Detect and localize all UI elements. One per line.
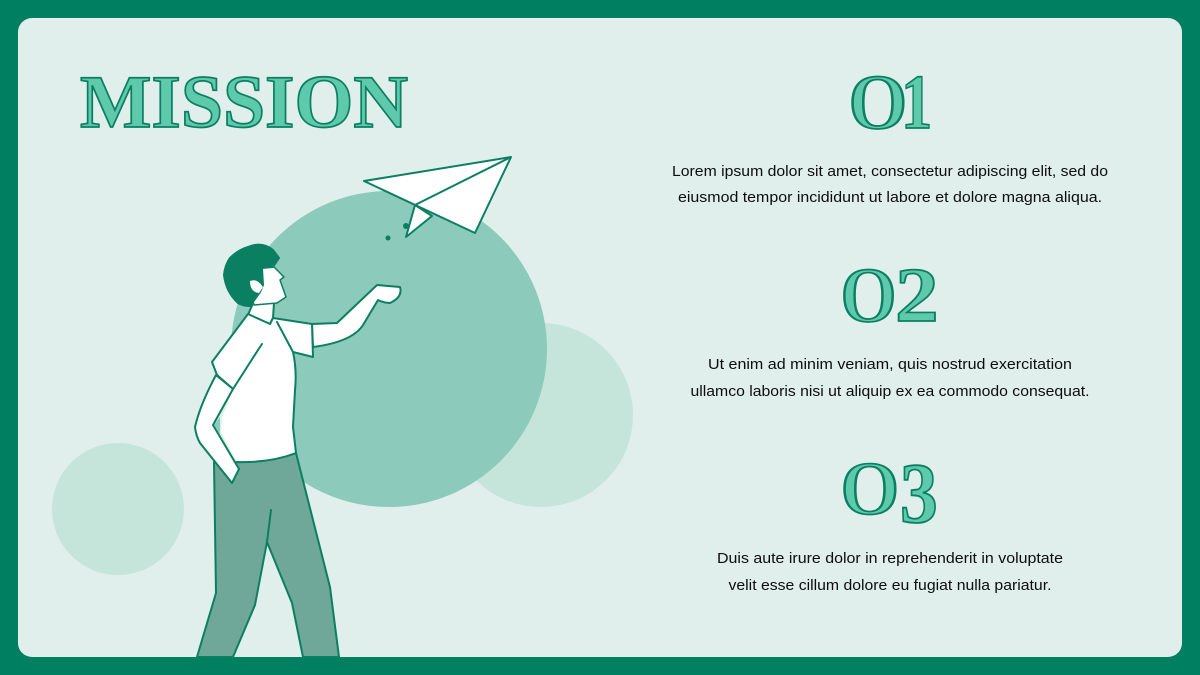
item 02 number: 2 [895,252,939,338]
item 03 number: 3 [900,447,938,541]
extended arm and hand [312,285,401,347]
item 01 text: Lorem ipsum dolor sit amet, consectetur adipiscing elit, sed do [672,163,1108,180]
paper plane [364,157,511,240]
item 03 number [840,447,938,541]
item 03 text: velit esse cillum dolore eu fugiat nulla pariatur. [728,577,1052,594]
illustration: man with paper plane [195,245,401,657]
gap between arm and torso [214,417,220,434]
item 01 number: 0 [848,59,908,145]
hand on hip arm [195,375,239,483]
item 01 number: 1 [901,60,932,146]
hair [224,245,279,306]
trousers [197,453,339,657]
item 03 number: 0 [840,447,900,531]
item 02 text: Ut enim ad minim veniam, quis nostrud exercitation [708,356,1072,373]
decorative circle: left [52,443,184,575]
ear [250,280,263,293]
item 01 text: eiusmod tempor incididunt ut labore et dolore magna aliqua. [678,189,1102,206]
item 02 text [690,356,1090,400]
item 02 number: 0 [840,253,897,338]
title: MISSION [80,61,408,144]
decorative circle: large [231,191,547,507]
shirt [212,314,313,462]
item 03 text: Duis aute irure dolor in reprehenderit in voluptate [717,550,1063,567]
item 01 text [672,163,1108,206]
decorative circle: right [449,323,633,507]
face [250,266,286,305]
item 02 number [840,252,939,338]
neck [248,303,274,324]
item 02 text: ullamco laboris nisi ut aliquip ex ea commodo consequat. [690,383,1090,400]
item 03 text [717,550,1063,594]
